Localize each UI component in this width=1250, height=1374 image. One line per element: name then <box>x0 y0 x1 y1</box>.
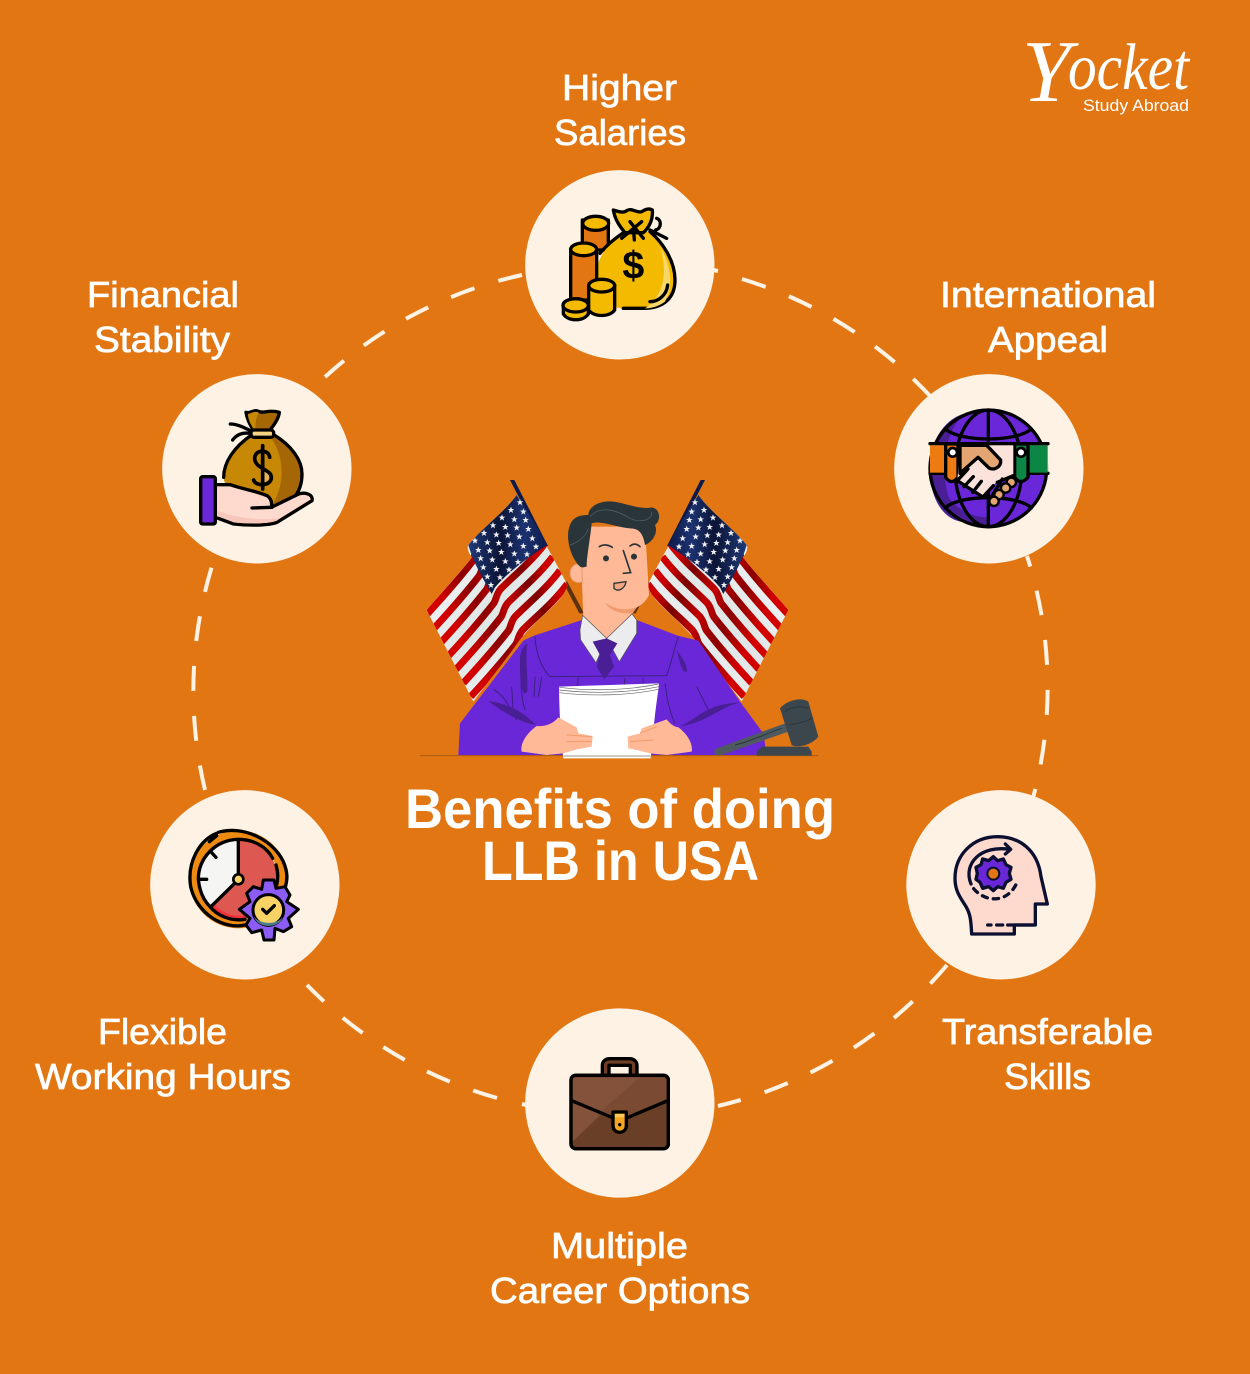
neck <box>582 583 640 638</box>
label: Higher Salaries: Salaries <box>554 112 686 153</box>
label: Flexible Working Hours <box>35 1011 291 1097</box>
left flag <box>427 480 584 702</box>
document <box>559 683 659 758</box>
label: Transferable Skills: Skills <box>1004 1056 1091 1097</box>
icon circle: clock with gear <box>150 790 339 979</box>
title: Benefits of doing <box>405 777 835 840</box>
label: Higher Salaries: Higher <box>562 67 677 108</box>
label: Financial Stability: Stability <box>94 319 230 360</box>
tie <box>593 638 617 679</box>
label: International Appeal: Appeal <box>988 319 1108 360</box>
ground line <box>420 754 818 757</box>
label: Financial Stability <box>87 274 239 360</box>
icon circle: money bag on hand <box>162 374 351 563</box>
gavel <box>714 699 818 756</box>
robe folds <box>493 637 708 723</box>
robe <box>458 620 767 755</box>
title <box>405 777 835 892</box>
chin shadow <box>605 603 637 613</box>
head <box>581 527 649 610</box>
label: Flexible Working Hours: Working Hours <box>35 1056 291 1097</box>
logo: Yocket Study Abroad <box>1022 24 1190 121</box>
title: LLB in USA <box>482 829 759 892</box>
label: Transferable Skills: Transferable <box>942 1011 1153 1052</box>
icon circle: briefcase <box>525 1008 714 1198</box>
left hand <box>521 717 593 755</box>
label: Multiple Career Options: Career Options <box>490 1270 750 1311</box>
face <box>599 544 640 573</box>
hair <box>568 501 659 567</box>
finger lines <box>567 727 657 742</box>
right hand <box>628 719 692 755</box>
icon circle: money bag and coins <box>525 170 714 359</box>
label: Flexible Working Hours: Flexible <box>98 1011 227 1052</box>
collar <box>580 615 607 663</box>
logo: Yocket Study Abroad: Y <box>1022 24 1079 121</box>
logo: Yocket Study Abroad: ocket <box>1068 31 1190 104</box>
icon circle: head with gear <box>906 790 1096 979</box>
dashed ring connecting benefits <box>193 270 1048 1106</box>
logo: Yocket Study Abroad: Study Abroad <box>1083 96 1189 115</box>
ear <box>570 564 582 582</box>
illustration: judge with flags and gavel <box>420 480 818 758</box>
label: International Appeal <box>940 274 1156 360</box>
label: Multiple Career Options <box>490 1225 750 1311</box>
icon circle: money bag and coins: $ <box>622 243 644 287</box>
label: International Appeal: International <box>940 274 1156 315</box>
right flag <box>631 480 788 702</box>
label: Higher Salaries <box>554 67 686 153</box>
icon circle: global handshake <box>894 374 1083 563</box>
label: Transferable Skills <box>942 1011 1153 1097</box>
label: Financial Stability: Financial <box>87 274 239 315</box>
label: Multiple Career Options: Multiple <box>551 1225 688 1266</box>
